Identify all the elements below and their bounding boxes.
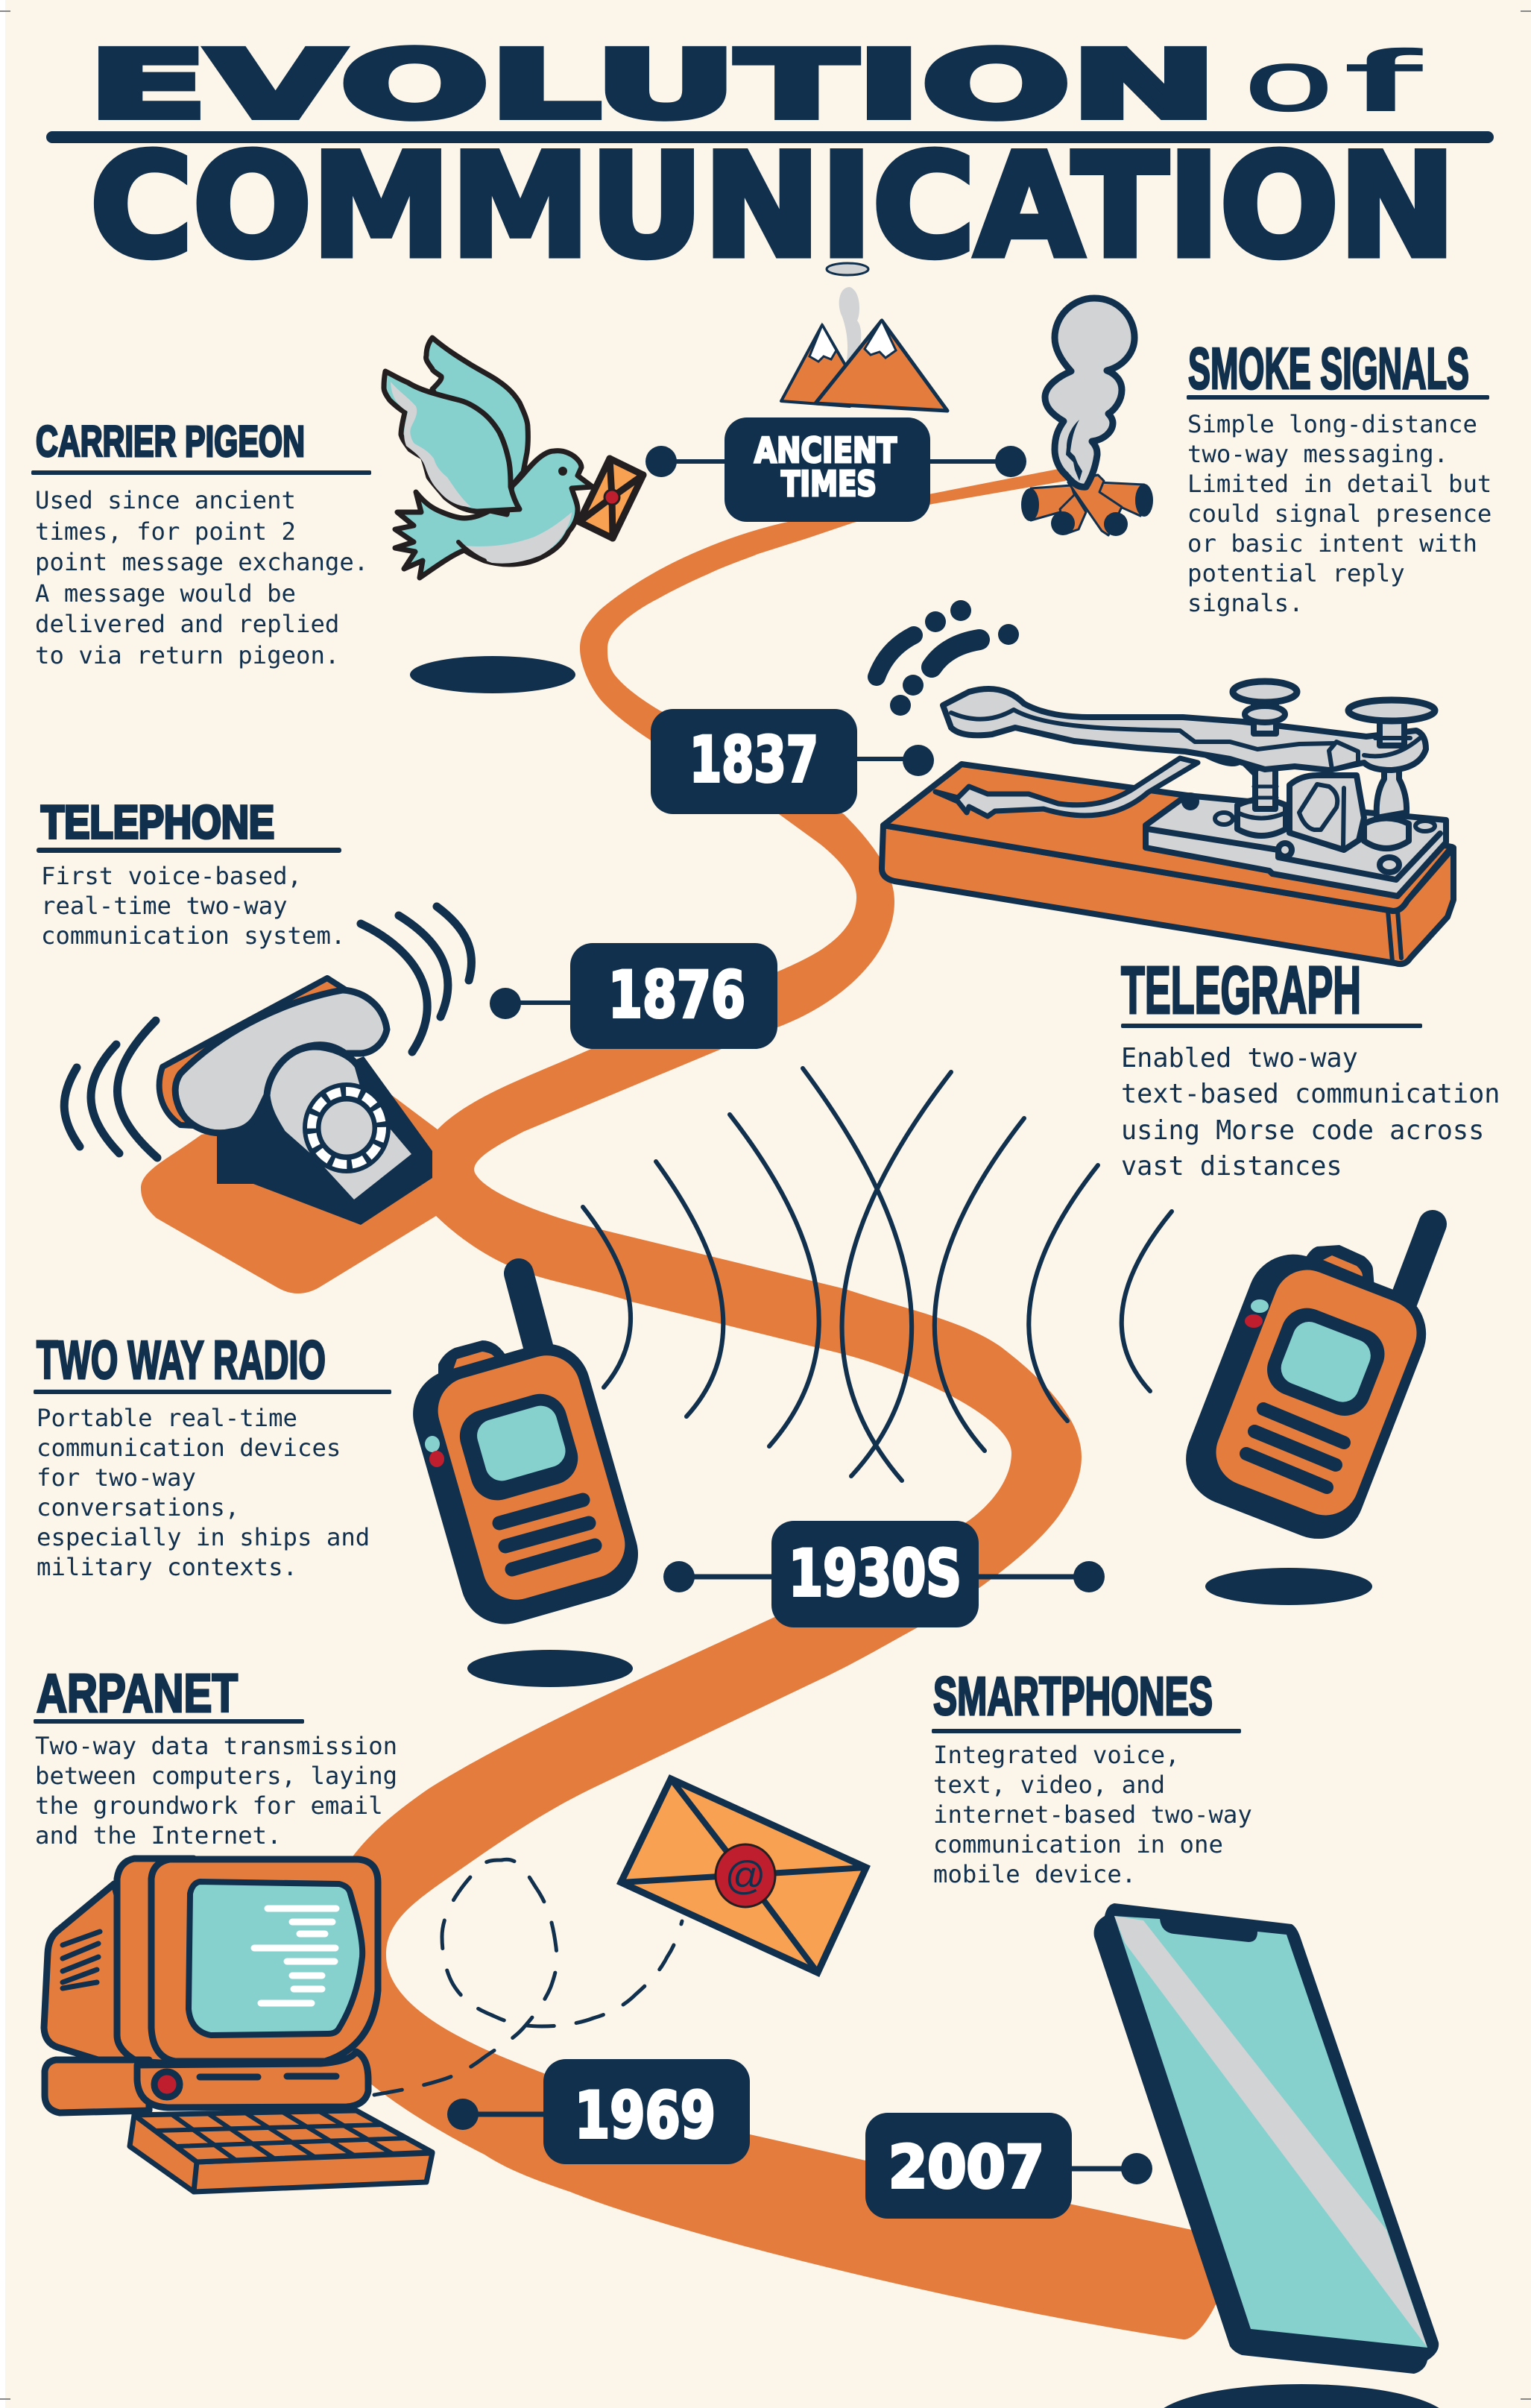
knobs <box>1254 705 1276 734</box>
base left <box>45 2060 149 2113</box>
post right <box>1377 768 1407 818</box>
monitor back <box>44 1884 149 2069</box>
metal plate <box>1146 795 1446 896</box>
icon: computer <box>44 1859 432 2192</box>
panel: two way radio: Portable real-time <box>37 1404 297 1432</box>
panel: smoke signals: signals. <box>1187 589 1304 617</box>
panel: two way radio <box>34 1331 391 1581</box>
panel: arpanet: the groundwork for email <box>35 1791 383 1820</box>
panel: carrier pigeon: CARRIER PIGEON <box>36 417 305 466</box>
timeline marker: 1969 <box>447 2059 750 2164</box>
icon: dashed message path <box>374 1859 682 2095</box>
icon: radio waves <box>583 1068 1172 1481</box>
panel: two way radio: communication devices <box>37 1434 341 1462</box>
panel: smoke signals <box>1187 335 1491 617</box>
panel: smoke signals: could signal presence <box>1187 499 1491 528</box>
title: o <box>1245 34 1333 129</box>
panel: arpanet: Two-way data transmission <box>35 1732 397 1760</box>
screen <box>189 1882 362 2035</box>
panel: carrier pigeon: Used since ancient <box>35 486 296 514</box>
lever <box>943 689 1426 770</box>
handset <box>175 990 387 1133</box>
panel: telephone: First voice-based, <box>41 862 302 890</box>
panel: two way radio: conversations, <box>37 1493 239 1522</box>
panel: telephone: communication system. <box>41 921 345 950</box>
icon: carrier pigeon <box>384 338 643 578</box>
base unit <box>137 2052 368 2108</box>
panel: two way radio: TWO WAY RADIO <box>37 1331 326 1390</box>
icon: smartphone <box>1094 1903 1439 2374</box>
carrier pigeon shadow <box>410 656 575 693</box>
icon: walkie talkie left <box>403 1273 648 1635</box>
icon: telegraph key <box>882 681 1453 964</box>
wire <box>935 758 1198 816</box>
panel: two way radio: for two-way <box>37 1463 196 1492</box>
timeline marker: ancient times <box>645 417 1026 522</box>
panel: two way radio: especially in ships and <box>37 1523 370 1551</box>
panel: telegraph: vast distances <box>1121 1151 1342 1182</box>
smoke <box>1045 298 1134 487</box>
radio right shadow <box>1205 1568 1372 1605</box>
timeline marker: 1837 <box>651 709 934 814</box>
panel: two way radio: military contexts. <box>37 1553 297 1581</box>
panel: telephone: real-time two-way <box>41 892 288 920</box>
panel: arpanet: between computers, laying <box>35 1762 397 1790</box>
panel: telephone <box>37 797 345 950</box>
icon: envelope in beak <box>579 458 643 538</box>
panel: telegraph: text-based communication <box>1121 1079 1500 1109</box>
icon: campfire with smoke signal <box>1021 298 1153 536</box>
panel: smoke signals: Simple long-distance <box>1187 410 1477 438</box>
panel: telegraph: TELEGRAPH <box>1121 954 1361 1028</box>
panel: carrier pigeon: delivered and replied <box>35 610 339 638</box>
timeline marker: 2007 <box>865 2113 1152 2219</box>
timeline marker: 1930s <box>663 1521 1105 1627</box>
screen lines <box>254 1909 336 2003</box>
smartphone shadow <box>1152 2384 1450 2408</box>
icon: rotary telephone <box>160 978 432 1225</box>
timeline marker: 1876: 1876 <box>608 958 745 1033</box>
panel: carrier pigeon: A message would be <box>35 579 296 608</box>
panel: smartphones: text, video, and <box>933 1771 1165 1799</box>
panel: carrier pigeon: to via return pigeon. <box>35 641 339 669</box>
panel: smartphones: communication in one <box>933 1830 1223 1859</box>
panel: telegraph: Enabled two-way <box>1121 1043 1358 1074</box>
panel: smoke signals: Limited in detail but <box>1187 470 1491 498</box>
title: EVOLUTION <box>88 31 1217 139</box>
panel: smartphones: Integrated voice, <box>933 1741 1180 1769</box>
wax seal <box>716 1844 775 1907</box>
handset back <box>160 978 354 1126</box>
title: COMMUNICATION <box>90 124 1456 289</box>
arch <box>1289 775 1364 850</box>
timeline marker: 1930s: 1930S <box>789 1536 962 1611</box>
timeline marker: ancient times: ANCIENT <box>754 430 897 470</box>
panel: smartphones: mobile device. <box>933 1860 1136 1888</box>
panel: carrier pigeon <box>31 417 371 669</box>
panel: telephone: TELEPHONE <box>41 797 274 848</box>
title: f <box>1345 34 1422 129</box>
title <box>46 31 1494 289</box>
panel: arpanet: ARPANET <box>37 1664 238 1724</box>
panel: arpanet <box>34 1664 397 1850</box>
panel: smartphones: SMARTPHONES <box>933 1667 1213 1727</box>
timeline marker: 2007: 2007 <box>888 2134 1044 2201</box>
panel: smoke signals: two-way messaging. <box>1187 440 1448 468</box>
panel: smartphones: internet-based two-way <box>933 1800 1252 1829</box>
panel: telegraph: using Morse code across <box>1121 1115 1484 1146</box>
panel: telegraph <box>1121 954 1500 1182</box>
dial <box>303 1082 391 1173</box>
monitor front <box>151 1859 378 2061</box>
timeline marker: 1969: 1969 <box>575 2078 716 2153</box>
post with cylinder <box>1237 799 1286 836</box>
timeline marker: 1837: 1837 <box>689 723 818 796</box>
phone body dome <box>267 1047 373 1167</box>
panel: carrier pigeon: times, for point 2 <box>35 517 296 546</box>
logs <box>1031 485 1079 520</box>
timeline marker: 1876 <box>490 943 777 1049</box>
panel: smoke signals: or basic intent with <box>1187 529 1477 558</box>
panel: smartphones <box>932 1667 1252 1888</box>
icon: email envelope <box>621 1779 866 1973</box>
timeline marker: ancient times: TIMES <box>781 464 877 504</box>
wooden base <box>882 825 1453 964</box>
icon: morse code marks <box>877 600 1019 716</box>
icon: mountains with smoke <box>781 263 947 411</box>
keyboard <box>130 2115 432 2192</box>
vents <box>63 1932 100 1988</box>
orange timeline ribbon <box>141 468 1216 2339</box>
radio left shadow <box>467 1650 633 1687</box>
icon: telephone sound waves <box>64 907 472 1158</box>
panel: carrier pigeon: point message exchange. <box>35 548 368 576</box>
icon: walkie talkie right <box>1172 1224 1439 1552</box>
wax seal: @ <box>725 1853 766 1898</box>
panel: smoke signals: potential reply <box>1187 559 1405 587</box>
panel: arpanet: and the Internet. <box>35 1821 282 1850</box>
